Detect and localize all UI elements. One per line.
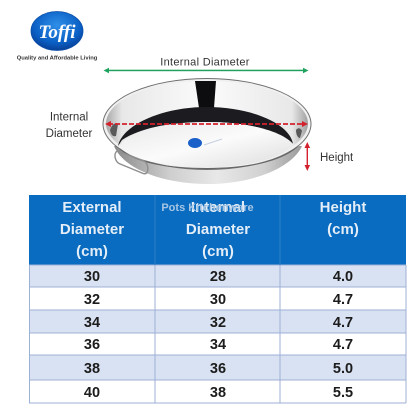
table body values: 32 [210,315,226,331]
table body values: 5.0 [333,361,353,377]
table body values: 38 [210,385,226,401]
watermark: Pots Kitchenware [161,202,254,214]
table header background [29,195,406,265]
table body values: 32 [84,292,100,308]
table body values: 28 [210,269,226,285]
tray floor [119,122,294,167]
label: left internal diameter [46,112,92,140]
tray wall shadow spots [110,123,118,136]
table body values: 4.7 [333,315,353,331]
arrow: dashed red diameter [105,121,308,127]
arrow: height [304,142,310,171]
table body values: 34 [84,315,100,331]
table header text: Diameter [186,221,250,238]
tray rim [102,78,312,170]
table body values: 30 [84,269,100,285]
table body values: 4.7 [333,292,353,308]
table header text: (cm) [76,243,108,260]
label: left internal diameter: Internal [50,112,88,124]
label: height: Height [320,152,354,164]
tray handle [115,151,148,174]
tray dark reflection [195,81,216,108]
logo: Toffi [31,12,83,50]
table header text: (cm) [202,243,234,260]
table header text: Internal [191,199,245,216]
table body values: 40 [84,385,100,401]
logo tagline: Quality and Affordable Living [17,56,98,62]
tray outer body [114,146,302,184]
logo: Toffi: Toffi [39,22,76,43]
label: left internal diameter: Diameter [46,128,92,140]
table body values: 36 [84,337,100,353]
table body values: 4.0 [333,269,353,285]
table body values: 34 [210,337,226,353]
table body values: 36 [210,361,226,377]
table header text: Diameter [60,221,124,238]
table header text: (cm) [327,221,359,238]
table body values: 5.5 [333,385,353,401]
label: top internal diameter: Internal Diameter [160,56,250,68]
photo: stainless steel tray [102,78,312,184]
table header text: Height [320,199,366,216]
arrow: top internal diameter [104,68,308,73]
table body values: 30 [210,292,226,308]
table row bands [29,265,406,403]
table body values [84,269,353,401]
table: size chart [29,195,406,403]
table body values: 38 [84,361,100,377]
table header text: External [62,199,122,216]
table header text [60,199,366,260]
table body values: 4.7 [333,337,353,353]
tray small logo [188,138,202,148]
